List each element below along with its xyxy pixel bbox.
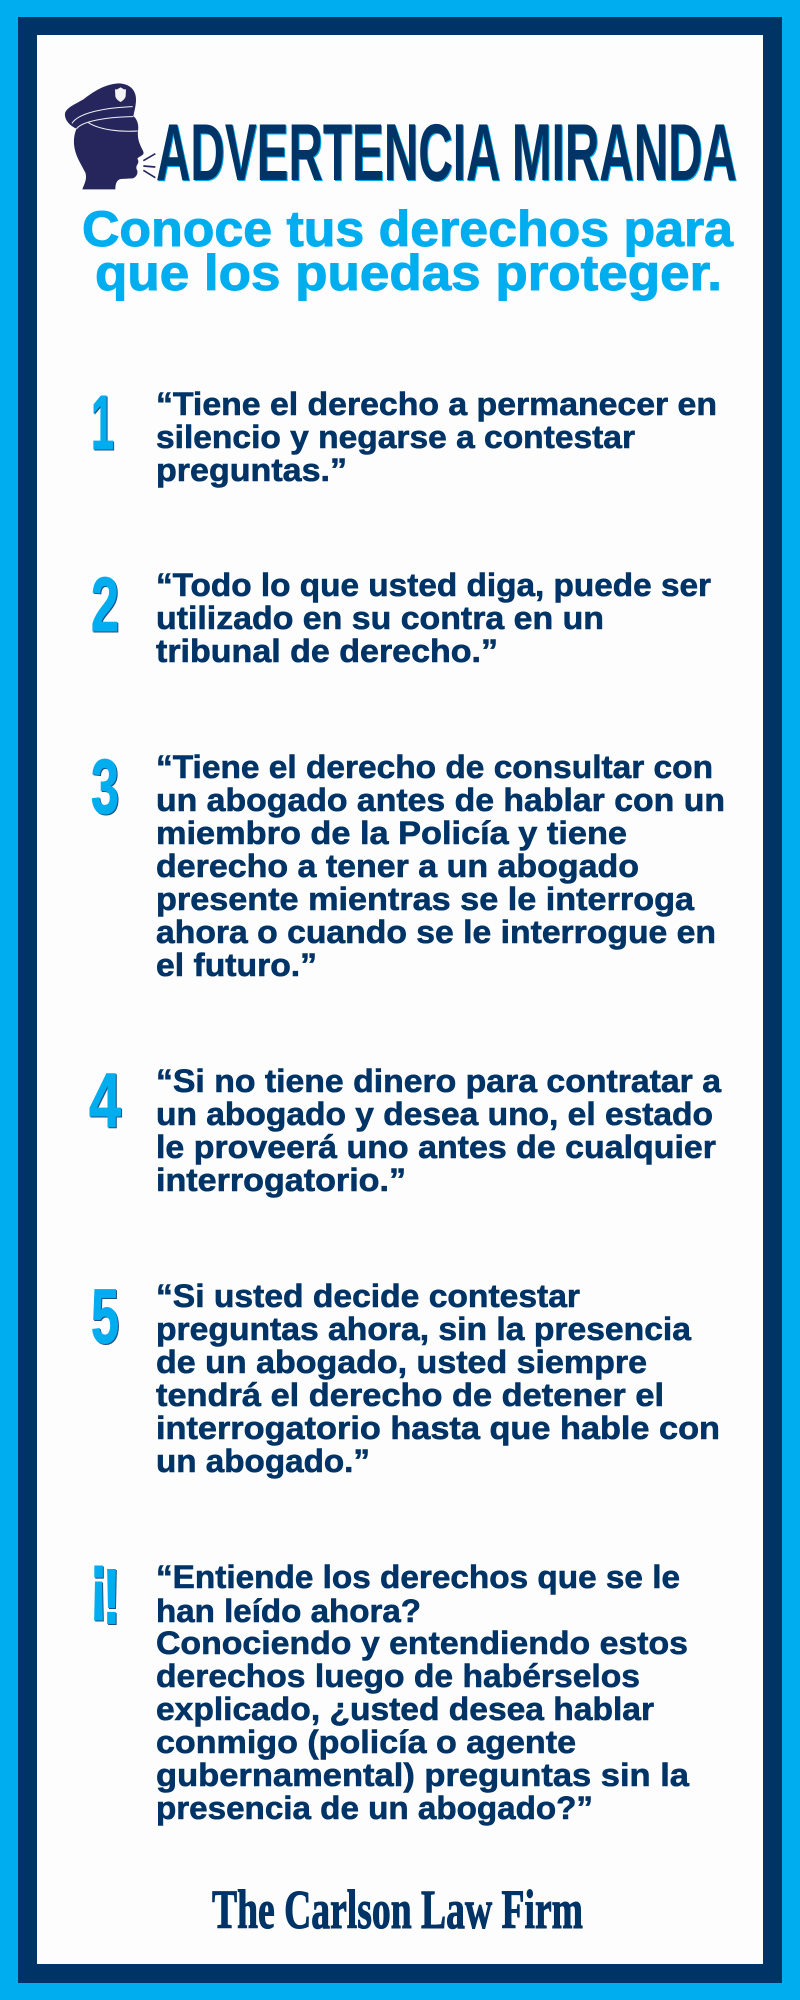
item 2 (91, 562, 711, 669)
text block 5: interrogatorio hasta que hable con (156, 1410, 720, 1446)
text block 3: presente mientras se le interroga (156, 881, 694, 917)
text block 2: utilizado en su contra en un (156, 600, 604, 636)
text block 6: “Entiende los derechos que se le (156, 1559, 680, 1595)
text block 5: tendrá el derecho de detener el (156, 1377, 664, 1413)
text block 5: un abogado.” (156, 1443, 370, 1479)
item 4 (89, 1058, 721, 1198)
text block 6: derechos luego de habérselos (156, 1658, 640, 1694)
text block 3: miembro de la Policía y tiene (156, 815, 627, 851)
item 3 (91, 744, 725, 983)
number 1: 1 (91, 380, 114, 466)
text block 5 (156, 1278, 720, 1479)
icon: cap badge (115, 87, 126, 102)
text block 6: presencia de un abogado?” (156, 1790, 593, 1826)
text block 3 (156, 749, 725, 983)
text block 2: tribunal de derecho.” (156, 633, 498, 669)
number 2: 2 (91, 562, 119, 648)
text block 6: han leído ahora? (156, 1593, 421, 1629)
text block 4: un abogado y desea uno, el estado (156, 1096, 713, 1132)
text block 6 (156, 1559, 689, 1826)
text block 6: gubernamental) preguntas sin la (156, 1757, 689, 1793)
text block 1: silencio y negarse a contestar (156, 419, 635, 455)
text block 5: preguntas ahora, sin la presencia (156, 1311, 691, 1347)
text block 3: el futuro.” (156, 947, 317, 983)
text block 4: “Si no tiene dinero para contratar a (156, 1063, 721, 1099)
item 6 (90, 1538, 689, 1826)
footer: firm name: The Carlson Law Firm (212, 1879, 583, 1940)
text block 1: preguntas.” (156, 452, 347, 488)
text block 5: “Si usted decide contestar (156, 1278, 580, 1314)
text block 1: “Tiene el derecho a permanecer en (156, 386, 717, 422)
text block 5: de un abogado, usted siempre (156, 1344, 647, 1380)
subtitle: Conoce tus derechos para (82, 201, 734, 257)
subtitle: que los puedas proteger. (95, 245, 722, 301)
text block 4: le proveerá uno antes de cualquier (156, 1129, 716, 1165)
number 4: 4 (89, 1058, 121, 1144)
cap band lines (72, 107, 138, 131)
number 5: 5 (91, 1274, 119, 1360)
exclamation marks: ! (103, 1554, 120, 1640)
text block 6: conmigo (policía o agente (156, 1724, 576, 1760)
text block 4 (156, 1063, 721, 1198)
text block 3: “Tiene el derecho de consultar con (156, 749, 713, 785)
subtitle (82, 201, 734, 301)
text block 4: interrogatorio.” (156, 1162, 406, 1198)
text block 1 (156, 386, 717, 488)
text block 6: explicado, ¿usted desea hablar (156, 1691, 654, 1727)
icon: sound lines (143, 154, 155, 178)
text block 3: ahora o cuando se le interrogue en (156, 914, 716, 950)
item 5 (91, 1274, 720, 1479)
text block 6: Conociendo y entendiendo estos (156, 1625, 688, 1661)
text block 3: derecho a tener a un abogado (156, 848, 639, 884)
text block 3: un abogado antes de hablar con un (156, 782, 725, 818)
icon: police officer head speaking (65, 83, 155, 189)
item 1 (91, 380, 717, 488)
text block 2 (156, 567, 711, 669)
number 3: 3 (91, 744, 119, 830)
text block 2: “Todo lo que usted diga, puede ser (156, 567, 711, 603)
exclamation marks: ¡ (90, 1538, 107, 1624)
